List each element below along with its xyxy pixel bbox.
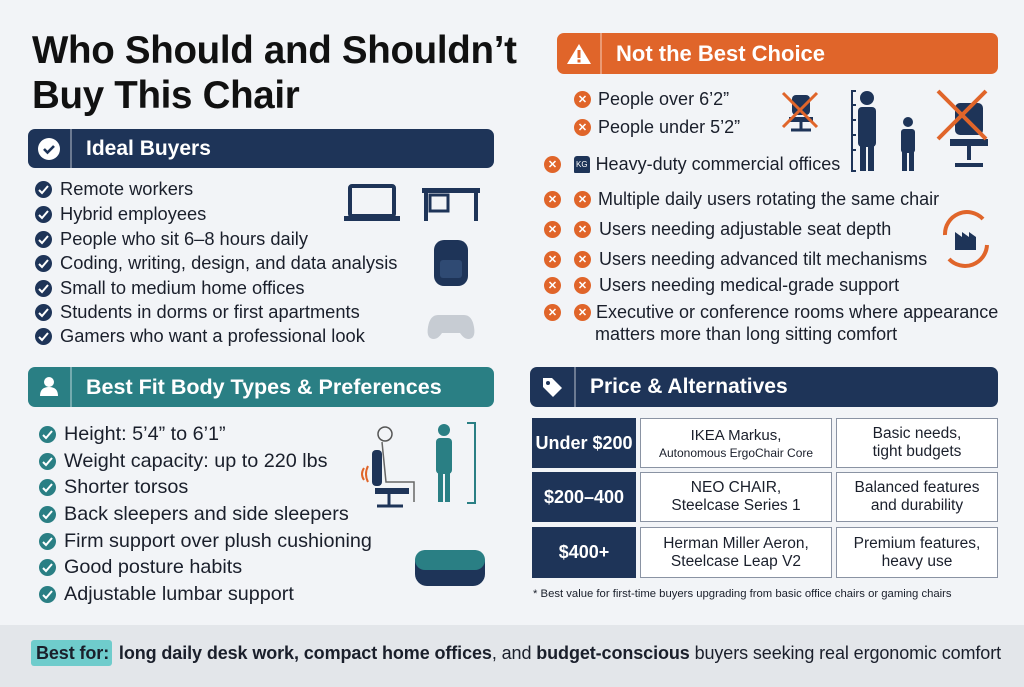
panel: not the best choice header [557,33,998,74]
list: not the best choice: ✕ [548,194,557,206]
table: price alternatives: Basic needs, [873,425,961,442]
list: not the best choice: Users needing adjustable seat depth [599,219,891,239]
table: price alternatives: Steelcase Series 1 [671,497,801,514]
footer: best for [0,625,1024,687]
table: price alternatives: IKEA Markus, [691,427,781,444]
list: not the best choice: ✕ [578,224,587,236]
table: price alternatives: $200–400 [544,487,624,507]
panel: not the best choice header: Not the Best Choice [616,40,825,66]
list: ideal buyers: Gamers who want a professional look [60,325,365,346]
list: best fit: Good posture habits [64,556,242,578]
list: best fit: Adjustable lumbar support [64,583,294,605]
footnote: * Best value for first-time buyers upgrading from basic office chairs or gaming chairs [533,588,952,600]
list: ideal buyers [35,178,397,346]
list: not the best choice: ✕ [578,194,587,206]
table: price alternatives: tight budgets [873,443,961,460]
icons: laptop, desk, backpack, gamepad [344,184,480,339]
list: not the best choice: ✕ [578,280,587,292]
panel: ideal buyers header: Ideal Buyers [86,136,211,160]
list: ideal buyers: People who sit 6–8 hours daily [60,228,308,249]
list: not the best choice: People over 6’2” [598,89,729,109]
list: not the best choice: ✕ [548,280,557,292]
title: Who Should and Shouldn’t [32,29,517,72]
list: ideal buyers: Students in dorms or first apartments [60,301,360,322]
icons: seated person, standing person, cushion [361,422,485,586]
table: price alternatives: Balanced features [855,479,979,496]
table: price alternatives: Premium features, [854,535,980,552]
list: not the best choice: ✕ [548,307,557,319]
panel: price header: Price & Alternatives [590,375,788,398]
list: best fit: Back sleepers and side sleepers [64,503,349,525]
table: price alternatives: $400+ [559,542,609,562]
table: price alternatives: Autonomous ErgoChair Core [659,446,813,460]
table: price alternatives: Steelcase Leap V2 [671,552,801,570]
list: not the best choice: Users needing advanced tilt mechanisms [599,249,927,269]
panel: best fit header [28,367,494,407]
list: not the best choice: ✕ [578,307,587,319]
list: best fit: Height: 5’4” to 6’1” [64,423,226,445]
panel: best fit header: Best Fit Body Types & Preferences [86,374,442,398]
list: not the best choice: ✕ [548,159,557,171]
table: price alternatives: Herman Miller Aeron, [663,535,809,552]
list: not the best choice: KG [576,160,588,169]
panel: price header [530,367,998,407]
list: not the best choice: ✕ [548,224,557,236]
list: not the best choice: matters more than long sitting comfort [595,324,897,344]
title: Buy This Chair [32,74,299,117]
list: ideal buyers: Hybrid employees [60,203,206,224]
list: not the best choice: ✕ [548,254,557,266]
list: ideal buyers: Coding, writing, design, and data analysis [60,252,397,273]
footer: best for: Best for: long daily desk work, compact home offices, and budget-conscious buyers seeking real ergonomic comfort [36,643,1001,663]
list: not the best choice: Heavy-duty commercial offices [596,154,840,174]
list: not the best choice: Multiple daily users rotating the same chair [598,189,939,209]
list: not the best choice: People under 5’2” [598,117,740,137]
panel: ideal buyers header [28,129,494,168]
list: not the best choice: ✕ [578,122,587,134]
list: not the best choice [544,89,998,344]
table: price alternatives: Under $200 [535,433,633,453]
title [32,29,517,117]
list: ideal buyers: Remote workers [60,178,193,199]
list: not the best choice: Users needing medical-grade support [599,275,899,295]
list: not the best choice: Executive or conference rooms where appearance [596,302,998,322]
list: ideal buyers: Small to medium home offices [60,277,305,298]
list: best fit: Shorter torsos [64,476,188,498]
table: price alternatives: NEO CHAIR, [691,479,781,496]
list: not the best choice: ✕ [578,254,587,266]
list: not the best choice: ✕ [578,94,587,106]
table: price alternatives: heavy use [882,552,952,570]
table: price alternatives [532,418,998,578]
list: best fit [39,423,372,605]
list: best fit: Weight capacity: up to 220 lbs [64,450,328,472]
icons: crossed chairs, height figures, factory [782,90,989,268]
list: best fit: Firm support over plush cushioning [64,530,372,552]
table: price alternatives: and durability [871,497,963,514]
